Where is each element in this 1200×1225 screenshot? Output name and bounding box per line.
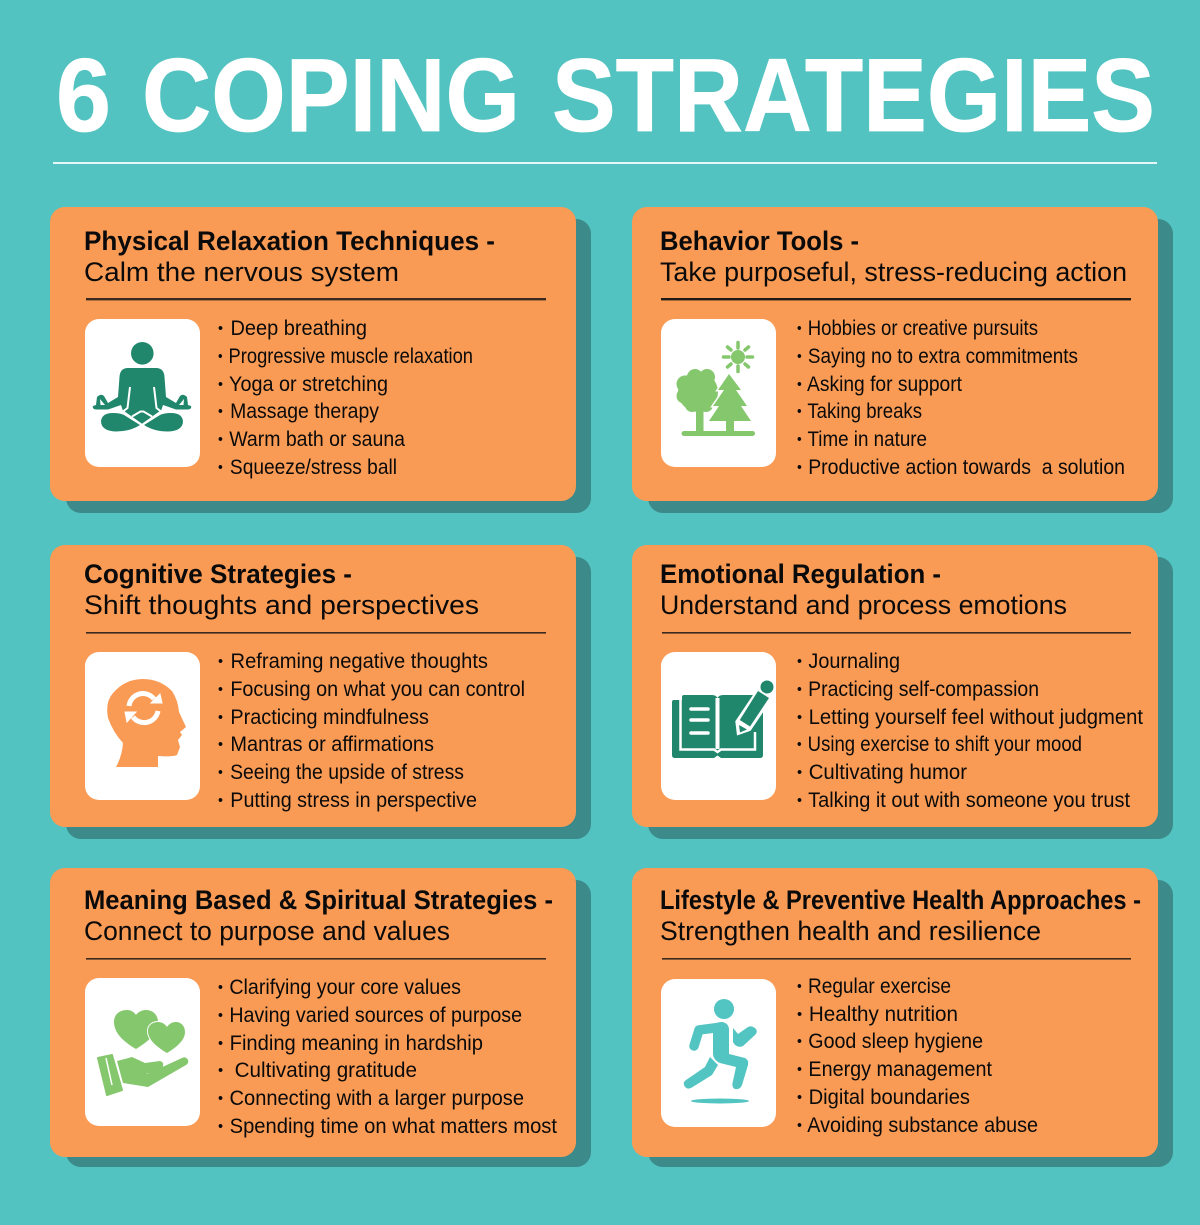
icon: trees and sun — [661, 319, 776, 467]
list: cognitive strategies: • — [218, 709, 223, 726]
list: behavior tools: Time in nature — [803, 428, 927, 451]
title: STRATEGIES — [552, 38, 1155, 154]
heading: meaning based: Meaning Based & Spiritual Strategies - — [84, 885, 553, 915]
heading: cognitive strategies — [84, 559, 479, 620]
heading: behavior tools — [660, 226, 1127, 287]
list: cognitive strategies: Putting stress in perspective — [225, 789, 477, 812]
panel: physical relaxation techniques — [50, 207, 591, 513]
list: emotional regulation: • — [797, 736, 802, 753]
list: behavior tools: Hobbies or creative pursuits — [803, 317, 1038, 340]
list: meaning based: Clarifying your core values — [224, 976, 461, 999]
list: cognitive strategies: Reframing negative thoughts — [225, 650, 488, 673]
list: meaning based: • — [218, 1035, 223, 1052]
list: behavior tools: Asking for support — [803, 373, 962, 396]
list: physical techniques: Warm bath or sauna — [224, 428, 405, 451]
list: physical techniques: • — [218, 348, 223, 365]
list: cognitive strategies: • — [218, 764, 223, 781]
list: physical techniques: • — [218, 320, 223, 337]
list: physical techniques: • — [218, 403, 223, 420]
list: behavior tools: Saying no to extra commitments — [803, 345, 1078, 368]
list: lifestyle: • — [797, 978, 802, 995]
list: behavior tools: Taking breaks — [803, 400, 922, 423]
list: meaning based: Finding meaning in hardship — [224, 1032, 483, 1055]
list: lifestyle: • — [797, 1117, 802, 1134]
list: emotional regulation: Using exercise to shift your mood — [803, 733, 1082, 756]
list: emotional regulation — [797, 650, 1143, 812]
heading: lifestyle: Lifestyle & Preventive Health Approaches - — [660, 885, 1141, 915]
heading: cognitive strategies: Shift thoughts and perspectives — [84, 590, 479, 620]
list: meaning based — [218, 976, 557, 1138]
heading: meaning based: Connect to purpose and values — [84, 916, 450, 946]
list: cognitive strategies: • — [218, 736, 223, 753]
list: emotional regulation: • — [797, 653, 802, 670]
heading: physical relaxation — [84, 226, 495, 287]
list: cognitive strategies — [218, 650, 525, 812]
list: behavior tools: Productive action towards a solution — [803, 456, 1125, 479]
heading: physical relaxation: Physical Relaxation Techniques - — [84, 226, 495, 256]
panel: cognitive strategies — [50, 545, 591, 839]
heading: physical relaxation: Calm the nervous system — [84, 257, 399, 287]
list: cognitive strategies: Practicing mindfulness — [225, 706, 429, 729]
list: cognitive strategies: • — [218, 653, 223, 670]
list: behavior tools: • — [797, 403, 802, 420]
list: behavior tools: • — [797, 376, 802, 393]
list: meaning based: • — [218, 1118, 223, 1135]
list: behavior tools: • — [797, 320, 802, 337]
list: emotional regulation: • — [797, 681, 802, 698]
list: emotional regulation: Letting yourself feel without judgment — [803, 706, 1143, 729]
list: physical techniques: • — [218, 459, 223, 476]
heading: behavior tools: Take purposeful, stress-reducing action — [660, 257, 1127, 287]
list: physical techniques: Deep breathing — [225, 317, 367, 340]
list: meaning based: • — [218, 979, 223, 996]
list: meaning based: Spending time on what matters most — [224, 1115, 557, 1138]
list: meaning based: Cultivating gratitude — [223, 1059, 417, 1082]
panel: meaning based and spiritual strategies — [50, 868, 591, 1167]
list: emotional regulation: • — [797, 764, 802, 781]
heading: emotional regulation: Understand and process emotions — [660, 590, 1067, 620]
list: behavior tools: • — [797, 459, 802, 476]
heading: lifestyle: Strengthen health and resilience — [660, 916, 1041, 946]
heading: meaning based — [84, 885, 553, 946]
list: emotional regulation: Practicing self-compassion — [803, 678, 1039, 701]
list: physical techniques: Yoga or stretching — [224, 373, 388, 396]
list: lifestyle — [797, 975, 1038, 1137]
list: cognitive strategies: Mantras or affirmations — [225, 733, 434, 756]
icon: open book and pencil — [661, 652, 776, 800]
list: behavior tools: • — [797, 348, 802, 365]
list: cognitive strategies: Focusing on what you can control — [225, 678, 525, 701]
list: lifestyle: Regular exercise — [803, 975, 951, 998]
title: COPING — [142, 38, 520, 154]
list: meaning based: Connecting with a larger purpose — [224, 1087, 524, 1110]
panel: lifestyle and preventive health — [632, 868, 1173, 1167]
list: lifestyle: • — [797, 1033, 802, 1050]
list: cognitive strategies: Seeing the upside of stress — [225, 761, 464, 784]
list: emotional regulation: Cultivating humor — [803, 761, 967, 784]
list: meaning based: Having varied sources of purpose — [224, 1004, 522, 1027]
heading: behavior tools: Behavior Tools - — [660, 226, 859, 256]
list: emotional regulation: Journaling — [803, 650, 900, 673]
list: meaning based: • — [218, 1090, 223, 1107]
list: physical techniques: Squeeze/stress ball — [225, 456, 397, 479]
heading: lifestyle — [660, 885, 1141, 946]
list: lifestyle: Digital boundaries — [803, 1086, 970, 1109]
list: lifestyle: Avoiding substance abuse — [803, 1114, 1038, 1137]
heading: emotional regulation — [660, 559, 1067, 620]
list: lifestyle: Good sleep hygiene — [803, 1030, 983, 1053]
list: lifestyle: • — [797, 1006, 802, 1023]
panel: emotional regulation — [632, 545, 1173, 839]
icon: running person — [661, 979, 776, 1127]
list: physical techniques: Progressive muscle relaxation — [223, 345, 473, 368]
list: behavior tools — [797, 317, 1125, 479]
list: physical techniques: • — [218, 376, 223, 393]
list: emotional regulation: • — [797, 709, 802, 726]
list: meaning based: • — [218, 1007, 223, 1024]
list: lifestyle: Healthy nutrition — [803, 1003, 958, 1026]
panel: behavior tools — [632, 207, 1173, 513]
list: lifestyle: • — [797, 1089, 802, 1106]
list: physical techniques — [218, 317, 473, 479]
list: emotional regulation: Talking it out with someone you trust — [803, 789, 1130, 812]
heading: emotional regulation: Emotional Regulation - — [660, 559, 941, 589]
list: emotional regulation: • — [797, 792, 802, 809]
icon: meditating person — [85, 319, 200, 467]
icon: head with refresh arrows — [85, 652, 200, 800]
list: cognitive strategies: • — [218, 792, 223, 809]
list: physical techniques: Massage therapy — [225, 400, 379, 423]
list: physical techniques: • — [218, 431, 223, 448]
list: lifestyle: Energy management — [803, 1058, 992, 1081]
list: behavior tools: • — [797, 431, 802, 448]
heading: cognitive strategies: Cognitive Strategies - — [84, 559, 352, 589]
icon: hand holding hearts — [85, 978, 200, 1126]
list: meaning based: • — [218, 1062, 223, 1079]
list: cognitive strategies: • — [218, 681, 223, 698]
title: 6 — [56, 38, 111, 154]
list: lifestyle: • — [797, 1061, 802, 1078]
title — [56, 38, 1155, 154]
